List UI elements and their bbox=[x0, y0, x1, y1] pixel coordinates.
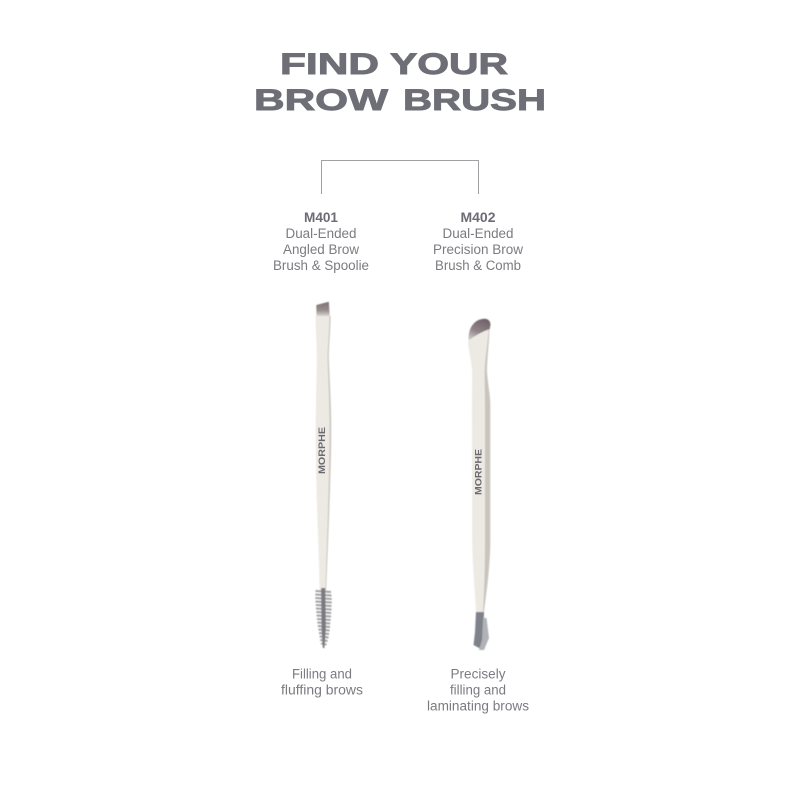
label: M401: Brush & Spoolie bbox=[273, 258, 369, 273]
label: M402: M402 bbox=[460, 210, 496, 225]
label: M401: M401 bbox=[304, 210, 338, 225]
caption: M401 use: fluffing brows bbox=[281, 682, 363, 698]
caption: M401 use bbox=[281, 666, 363, 698]
caption: M401 use: Filling and bbox=[292, 666, 352, 682]
handle body bbox=[316, 316, 330, 590]
brush: M401 angled brush and spoolie bbox=[315, 302, 332, 648]
handle shadow bbox=[322, 316, 331, 590]
caption: M402 use bbox=[427, 666, 529, 714]
bracket connecting both brushes bbox=[322, 160, 478, 194]
label: M401: Dual-Ended bbox=[286, 226, 356, 241]
icon: comb teeth bbox=[479, 618, 489, 650]
icon: rounded angled bristles bbox=[468, 319, 490, 343]
icon: spoolie bbox=[315, 588, 332, 648]
icon: angled bristles bbox=[316, 302, 330, 316]
label: M402 bbox=[433, 210, 523, 273]
handle body bbox=[468, 330, 489, 612]
brush: M402 precision brush and comb bbox=[468, 319, 490, 650]
title bbox=[254, 48, 546, 117]
title: FIND bbox=[280, 48, 379, 81]
label: M401 bbox=[273, 210, 369, 273]
brush artwork: M402 bbox=[468, 319, 490, 650]
brand text: MORPHE: MORPHE bbox=[317, 427, 327, 474]
label: M402: Brush & Comb bbox=[435, 258, 521, 273]
caption: M402 use: laminating brows bbox=[427, 698, 529, 714]
comb bbox=[474, 612, 484, 649]
brand text: MORPHE: MORPHE bbox=[474, 449, 484, 495]
caption: M402 use: Precisely bbox=[450, 666, 506, 682]
label: M401: Angled Brow bbox=[283, 242, 359, 257]
title: BROW bbox=[254, 84, 389, 117]
title: BRUSH bbox=[403, 84, 546, 117]
label: M402: Precision Brow bbox=[433, 242, 523, 257]
label: M402: Dual-Ended bbox=[442, 226, 514, 241]
caption: M402 use: filling and bbox=[450, 682, 506, 698]
brush artwork: M401 bbox=[315, 302, 332, 648]
title: YOUR bbox=[390, 48, 508, 81]
handle shadow bbox=[480, 329, 490, 612]
